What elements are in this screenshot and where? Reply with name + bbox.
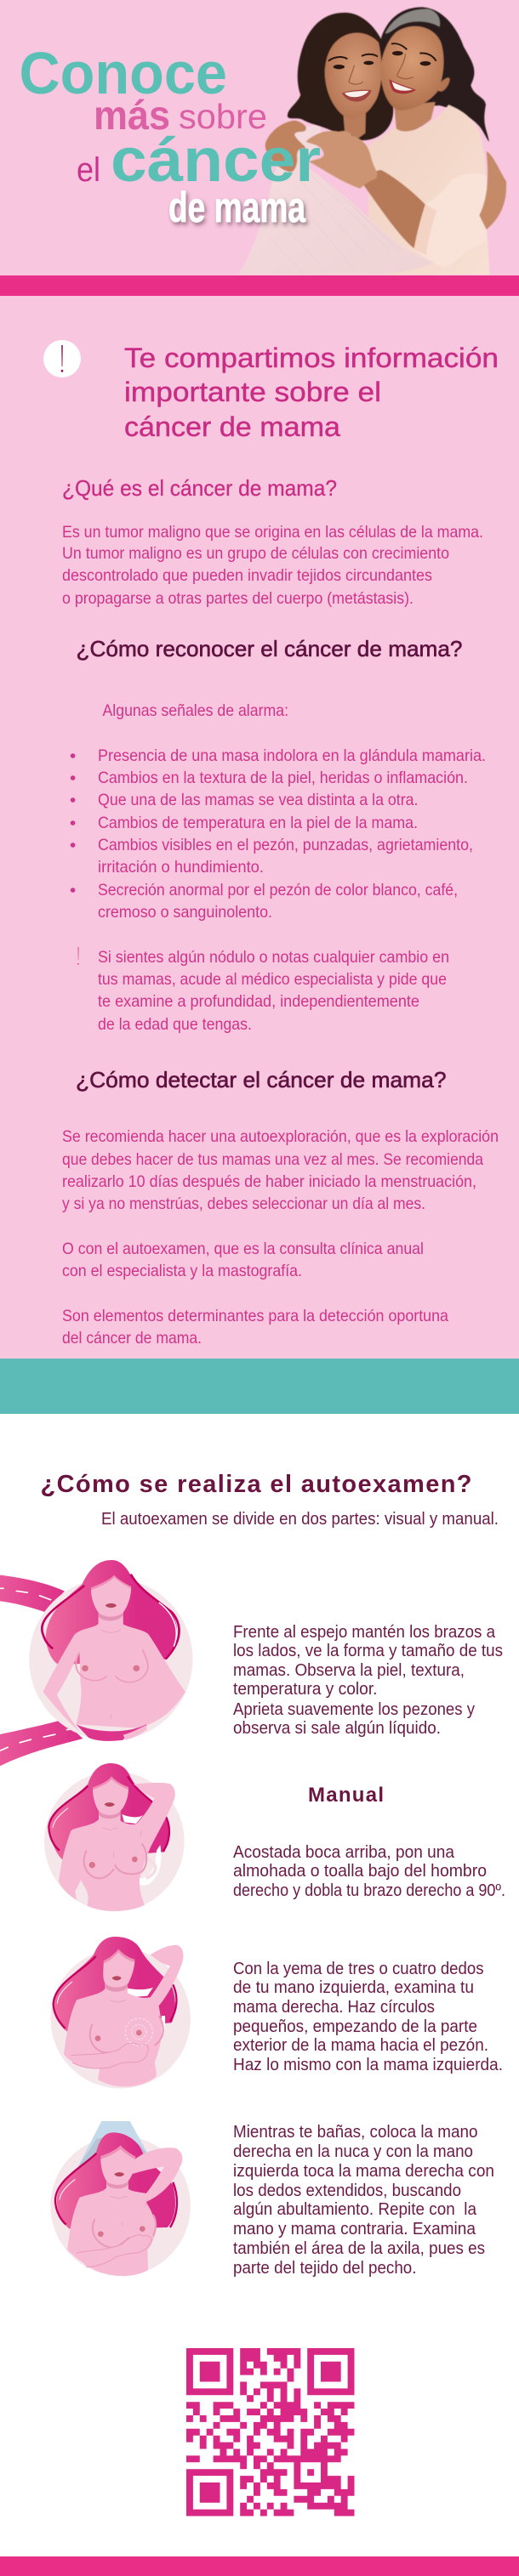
text: shower: izquierda toca la mama derecha con [233,2162,494,2181]
text: visual exam: los lados, ve la forma y tamaño de tus [233,1642,503,1660]
bullet list: alarm signs: Cambios de temperatura en la piel de la mama. [98,814,418,832]
text: three fingers: de tu mano izquierda, examina tu [233,1978,474,1997]
callout: see a specialist: te examine a profundidad, independientemente [98,992,419,1011]
magenta strip [0,275,519,296]
main heading [124,343,499,442]
heading: cómo detectar: ¿Cómo detectar el cáncer de mama? [76,1067,446,1092]
bullet list: alarm signs: Secreción anormal por el pezón de color blanco, café, [98,881,458,899]
text: shower: mano y mama contraria. Examina [233,2220,476,2238]
text block: detection: O con el autoexamen, que es la consulta clínica anual [62,1240,424,1258]
bottom magenta strip [0,2556,519,2576]
title line: cáncer: cáncer [111,127,321,195]
teal band [0,1359,519,1414]
text: three fingers: Con la yema de tres o cuatro dedos [233,1960,483,1978]
woman 2 facial features [389,43,442,101]
bullet list: alarm signs: Presencia de una masa indolora en la glándula mamaria. [98,746,486,765]
bullet list: alarm signs: Cambios en la textura de la piel, heridas o inflamación. [98,769,468,787]
text block: definition: descontrolado que pueden invadir tejidos circundantes [62,566,432,585]
text block: definition: Un tumor maligno es un grupo de células con crecimiento [62,544,449,563]
title line: de mama: de mama [168,184,306,231]
text: three fingers: Haz lo mismo con la mama izquierda. [233,2056,503,2074]
illustration: visual exam with road [0,1560,192,1766]
bullet list: alarm signs [71,746,486,922]
text block: detection: y si ya no menstrúas, debes seleccionar un día al mes. [62,1194,425,1213]
text block: definition: Es un tumor maligno que se origina en las células de la mama. [62,523,483,542]
background: pink information panel [0,0,519,1359]
text: visual exam [233,1623,503,1738]
text: shower: algún abultamiento. Repite con la [233,2200,477,2219]
sweater ribbing [270,176,406,274]
text: shower [233,2123,494,2278]
heading: Manual: Manual [308,1784,384,1807]
text: three fingers: pequeños, empezando de la parte [233,2017,477,2036]
title line: el: el [77,151,100,189]
bullet list: alarm signs: Cambios visibles en el pezón, punzadas, agrietamiento, [98,836,473,854]
hero title [19,40,321,231]
text block: detection: con el especialista y la mastografía. [62,1262,302,1280]
main heading: Te compartimos información [124,343,499,373]
callout: see a specialist: Si sientes algún nódulo o notas cualquier cambio en [98,948,449,967]
text block: detection [62,1127,499,1348]
text: three fingers: exterior de la mama hacia el pezón. [233,2036,488,2055]
title line: Conoce: Conoce [19,40,227,106]
icon: exclamation in white circle [43,340,81,377]
title line: sobre: sobre [179,97,267,136]
text: shower: derecha en la nuca y con la mano [233,2142,473,2161]
QR code [186,2348,354,2516]
woman 1 facial features [328,54,378,102]
illustration: circles on the breast [50,1937,191,2089]
text block: definition [62,523,483,608]
text block: detection: realizarlo 10 días después de haber iniciado la menstruación, [62,1172,476,1191]
text block: detection: del cáncer de mama. [62,1329,202,1348]
text: visual exam: mamas. Observa la piel, textura, [233,1661,465,1680]
title line: más: más [94,94,170,139]
main heading: importante sobre el [124,377,381,407]
text: intro alarm signs: Algunas señales de alarma: [102,701,288,720]
heading: qué es: ¿Qué es el cáncer de mama? [62,475,337,501]
text: visual exam: observa si sale algún líquido. [233,1719,441,1738]
main heading: cáncer de mama [124,411,340,442]
bullet list: alarm signs: Que una de las mamas se vea distinta a la otra. [98,791,419,809]
bullet list: alarm signs: irritación o hundimiento. [98,858,264,877]
illustration: in the shower [50,2121,191,2276]
text: visual exam: Aprieta suavemente los pezones y [233,1700,475,1719]
illustration: lying down arm raised [44,1763,185,1911]
callout: see a specialist: de la edad que tengas. [98,1015,252,1034]
text: lying down: Acostada boca arriba, pon una [233,1843,455,1862]
callout: see a specialist [98,948,449,1034]
text block: definition: o propagarse a otras partes del cuerpo (metástasis). [62,589,413,608]
callout: see a specialist: tus mamas, acude al médico especialista y pide que [98,970,447,989]
text: shower: también el área de la axila, pues es [233,2239,485,2258]
text: shower: los dedos extendidos, buscando [233,2182,461,2200]
text: three fingers [233,1960,503,2074]
hero photo: two women embracing [238,7,506,275]
bullet list: alarm signs: cremoso o sanguinolento. [98,903,272,922]
text: lying down [233,1843,505,1900]
text block: detection: que debes hacer de tus mamas una vez al mes. Se recomienda [62,1150,483,1169]
text block: detection: Son elementos determinantes para la detección oportuna [62,1307,448,1325]
heading: cómo reconocer: ¿Cómo reconocer el cáncer de mama? [77,636,463,661]
text: two parts: El autoexamen se divide en dos partes: visual y manual. [101,1510,499,1529]
road [0,1575,83,1766]
text: three fingers: mama derecha. Haz círculos [233,1998,435,2017]
text: visual exam: Frente al espejo mantén los brazos a [233,1623,496,1642]
text: shower: Mientras te bañas, coloca la mano [233,2123,478,2142]
text: shower: parte del tejido del pecho. [233,2259,417,2278]
text: visual exam: temperatura y color. [233,1680,378,1699]
text: lying down: almohada o toalla bajo del hombro [233,1862,487,1881]
heading: autoexamen: ¿Cómo se realiza el autoexamen? [41,1471,471,1498]
icon: small exclamation [77,947,79,965]
